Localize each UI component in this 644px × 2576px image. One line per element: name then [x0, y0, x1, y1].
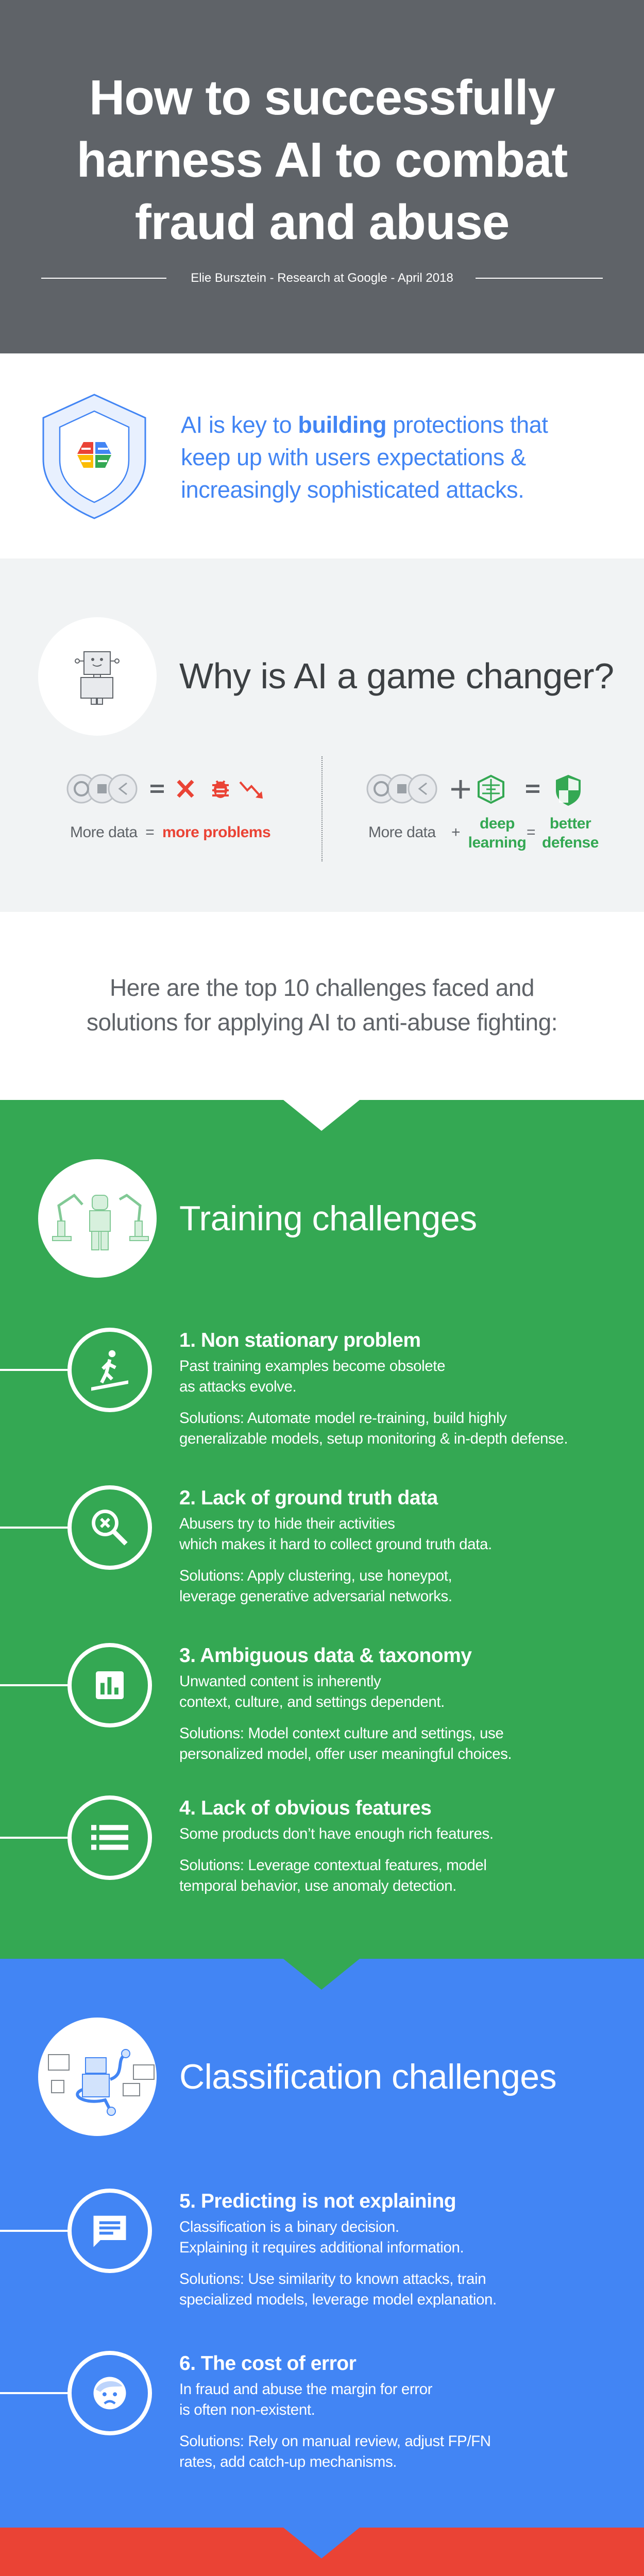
equation: more data + deep learning = better defense: deep [480, 815, 515, 832]
panel: training challenges [0, 1100, 644, 1959]
item text: Solutions: Rely on manual review, adjust FP/FN [179, 2433, 491, 2450]
item text: Unwanted content is inherently [179, 1673, 381, 1690]
notch arrow [283, 1959, 360, 1990]
icon: sad face [67, 2351, 152, 2435]
icon: runner on ramp [67, 1328, 152, 1412]
icon: magnifier with x [67, 1485, 152, 1570]
item text [179, 2190, 497, 2308]
item text: personalized model, offer user meaningful choices. [179, 1745, 512, 1762]
item 1: non stationary problem [0, 1328, 568, 1447]
panel: why is AI a game changer [0, 558, 644, 912]
icon: bar chart [67, 1643, 152, 1727]
item text: 4. Lack of obvious features [179, 1797, 431, 1819]
heading: why is AI a game changer: Why is AI a game changer? [179, 656, 614, 696]
header panel [0, 0, 644, 353]
notch arrow [283, 1100, 360, 1131]
item text [179, 2352, 491, 2470]
item text: 5. Predicting is not explaining [179, 2190, 456, 2212]
item text: 2. Lack of ground truth data [179, 1487, 438, 1509]
intro text: increasingly sophisticated attacks. [181, 477, 524, 503]
item text: as attacks evolve. [179, 1378, 296, 1395]
panel: classification challenges [0, 1959, 644, 2528]
title: harness AI to combat [77, 132, 567, 188]
item text: Abusers try to hide their activities [179, 1515, 395, 1532]
equation: more data + deep learning = better defense: + [451, 824, 461, 841]
equation: more data + deep learning = better defense: = [527, 824, 536, 841]
equation: more data = more problems [67, 774, 270, 841]
icon: robot arms [38, 1159, 157, 1278]
item text: Classification is a binary decision. [179, 2218, 399, 2235]
equation: more data + deep learning = better defense: defense [542, 834, 599, 851]
item text: leverage generative adversarial networks. [179, 1588, 452, 1605]
item text: rates, add catch-up mechanisms. [179, 2453, 397, 2470]
title: How to successfully [89, 70, 555, 125]
equation: more data + deep learning = better defense: learning [468, 834, 526, 851]
item text: which makes it hard to collect ground truth data. [179, 1536, 492, 1553]
item 5: predicting is not explaining [0, 2189, 497, 2308]
equation: more data + deep learning = better defense [367, 774, 599, 851]
item text: Solutions: Apply clustering, use honeypot, [179, 1567, 452, 1584]
intro text: AI is key to building protections that [181, 412, 548, 438]
byline: Elie Bursztein - Research at Google - April 2018 [191, 271, 453, 285]
item 4: lack of obvious features [0, 1795, 494, 1894]
text block: top 10 challenges intro [87, 974, 557, 1036]
item text: Solutions: Leverage contextual features, model [179, 1857, 487, 1874]
equation: more data + deep learning = better defense: better [550, 815, 591, 832]
icon: classifying robot [38, 2018, 157, 2136]
item 6: the cost of error [0, 2351, 491, 2470]
dotted divider [321, 756, 323, 861]
panel: attacks [0, 2528, 644, 2576]
intro text [181, 412, 548, 503]
item text: Solutions: Automate model re-training, build highly [179, 1410, 507, 1427]
item 3: ambiguous data & taxonomy [0, 1643, 512, 1762]
item text: Some products don’t have enough rich features. [179, 1825, 494, 1842]
item text [179, 1329, 568, 1447]
item text: Past training examples become obsolete [179, 1358, 445, 1375]
item text: is often non-existent. [179, 2401, 315, 2418]
title [77, 70, 568, 250]
item text: temporal behavior, use anomaly detection. [179, 1877, 456, 1894]
item text: In fraud and abuse the margin for error [179, 2381, 432, 2398]
item text: 1. Non stationary problem [179, 1329, 421, 1351]
item text: context, culture, and settings dependent. [179, 1693, 445, 1710]
item text [179, 1645, 512, 1762]
title: fraud and abuse [135, 195, 509, 250]
notch arrow [283, 2528, 360, 2558]
heading: classification challenges: Classification challenges [179, 2057, 556, 2096]
text block: top 10 challenges intro: solutions for applying AI to anti-abuse fighting: [87, 1009, 557, 1036]
item text: 6. The cost of error [179, 2352, 356, 2375]
item text: Solutions: Model context culture and settings, use [179, 1725, 503, 1742]
equation: more data + deep learning = better defense: More data [368, 824, 436, 841]
text block: top 10 challenges intro: Here are the top 10 challenges faced and [110, 974, 534, 1001]
item text: Explaining it requires additional information. [179, 2239, 464, 2256]
icon: list [67, 1795, 152, 1880]
icon: chat bubble [67, 2189, 152, 2273]
heading: training challenges: Training challenges [179, 1199, 477, 1238]
icon: robot [38, 617, 157, 736]
intro text: keep up with users expectations & [181, 444, 526, 470]
item text: 3. Ambiguous data & taxonomy [179, 1645, 471, 1667]
equation: more data = more problems: More data = more problems [70, 824, 270, 841]
item text [179, 1797, 494, 1894]
item text: Solutions: Use similarity to known attacks, train [179, 2270, 486, 2287]
item text: generalizable models, setup monitoring & in-depth defense. [179, 1430, 568, 1447]
panel: intro statement [0, 353, 644, 558]
item 2: lack of ground truth data [0, 1485, 492, 1605]
item text [179, 1487, 492, 1605]
item text: specialized models, leverage model explanation. [179, 2291, 497, 2308]
icon: shield with brain [42, 394, 146, 519]
